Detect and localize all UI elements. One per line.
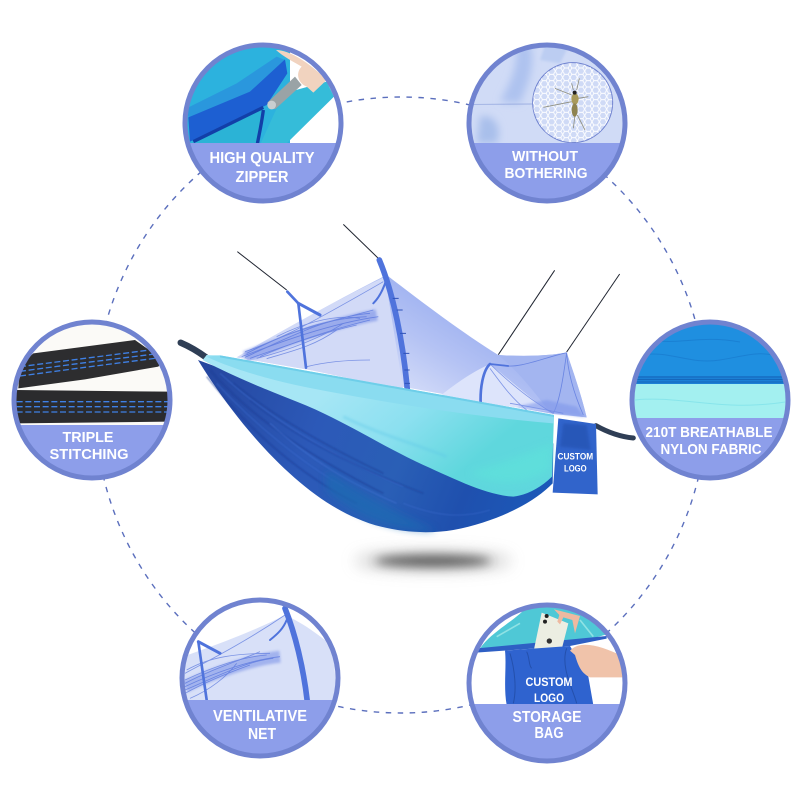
label text: NET (248, 726, 276, 743)
label text: TRIPLE (62, 429, 114, 446)
ring (185, 45, 341, 201)
label text (213, 708, 307, 743)
label text: STORAGE (512, 709, 582, 726)
label text (646, 424, 772, 458)
hammock dark outer body (198, 360, 553, 532)
net photo (180, 598, 340, 758)
logo tag: LOGO (564, 463, 587, 473)
net and mosquito photo (472, 48, 622, 143)
bag photo: LOGO (534, 691, 564, 705)
ring (14, 322, 170, 478)
label text: HIGH QUALITY (210, 150, 315, 167)
label text (210, 150, 315, 186)
label text: BAG (534, 725, 564, 742)
label text: ZIPPER (236, 169, 288, 186)
mosquito (543, 78, 588, 130)
label text (50, 429, 128, 463)
label band (474, 143, 620, 198)
fabric photo (634, 324, 786, 418)
label text: BOTHERING (504, 165, 588, 182)
badge: storage bag (467, 603, 627, 763)
logo tag: CUSTOM (557, 451, 593, 461)
suspension cords (237, 224, 620, 355)
badge: ventilative net (180, 598, 340, 758)
left hanging strap (181, 343, 206, 357)
net straps (287, 260, 508, 404)
label band (20, 425, 164, 476)
badge: triple stitching (12, 320, 172, 480)
ring (632, 322, 788, 478)
zipper photo (188, 48, 336, 143)
hammock shadow (355, 552, 511, 570)
logo tag (553, 418, 598, 494)
dashed connecting ring (95, 97, 707, 713)
label text: NYLON FABRIC (660, 441, 762, 458)
webbing photo (16, 326, 168, 424)
label text (504, 148, 588, 182)
ring (182, 600, 338, 756)
ring (469, 605, 625, 761)
label band (474, 704, 620, 758)
label text (512, 709, 582, 742)
badge: without bothering (467, 40, 627, 203)
hammock illustration (181, 224, 633, 532)
label text: VENTILATIVE (213, 708, 307, 725)
bag photo: CUSTOM (526, 675, 573, 689)
net gathered folds (245, 315, 377, 357)
badge: high quality zipper (180, 40, 343, 203)
label text: WITHOUT (512, 148, 578, 165)
label text: 210T BREATHABLE (646, 424, 772, 441)
label band (636, 418, 784, 476)
hammock light cyan panel (203, 355, 554, 497)
bag photo (474, 608, 622, 704)
badge: 210T breathable nylon fabric (630, 320, 790, 480)
mosquito net (237, 260, 587, 417)
right hanging strap (596, 426, 633, 438)
label text: STITCHING (50, 446, 128, 463)
label band (188, 700, 332, 754)
label band (190, 143, 336, 198)
ring (469, 45, 625, 201)
